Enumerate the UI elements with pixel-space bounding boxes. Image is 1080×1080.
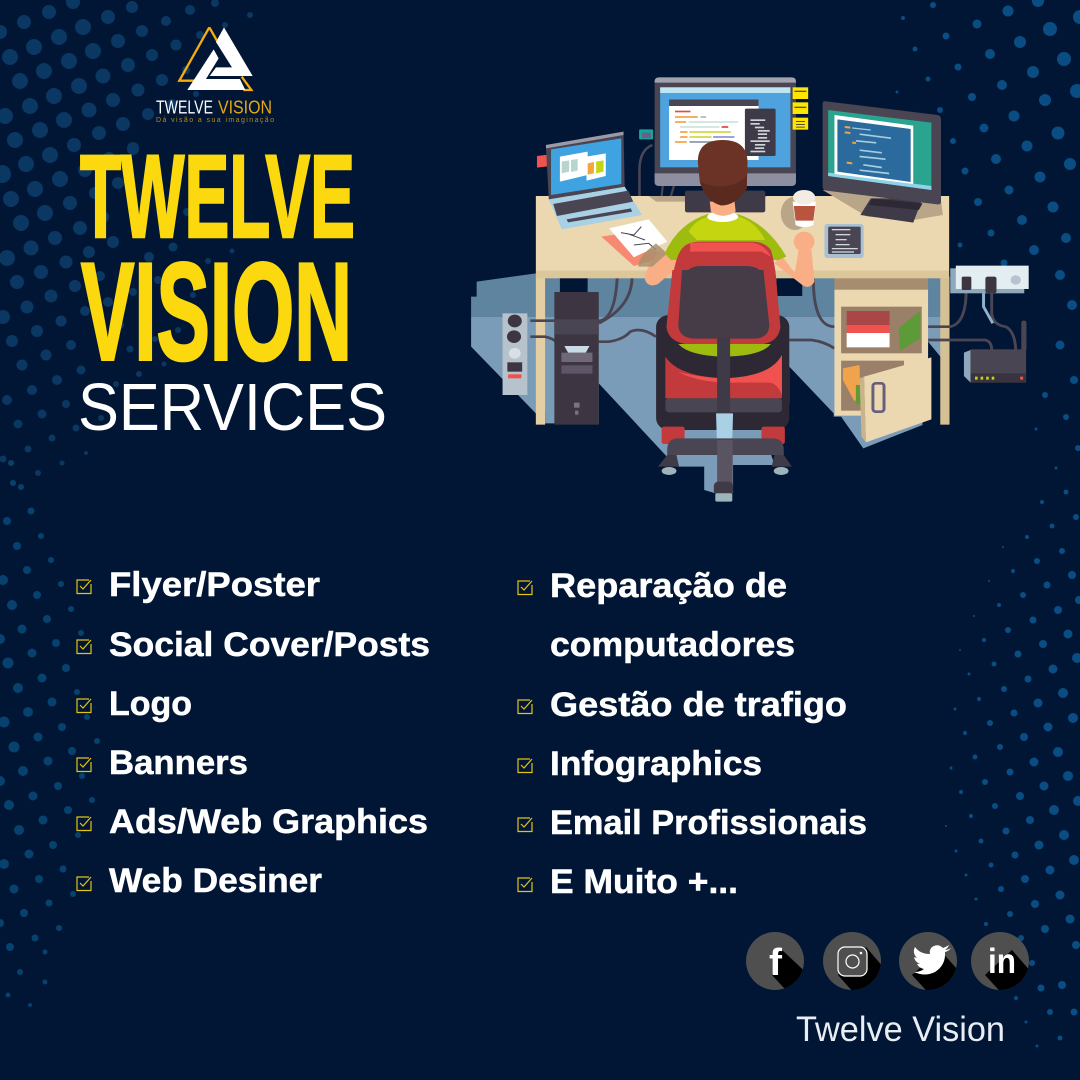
services list: left column: Flyer/Poster	[109, 566, 320, 604]
right monitor	[823, 101, 943, 223]
title: SERVICES	[78, 370, 387, 445]
title	[78, 131, 387, 445]
social icons	[746, 932, 1029, 990]
services list: right column	[518, 567, 867, 901]
icon: facebook	[746, 932, 804, 990]
power strip	[503, 313, 527, 395]
icon: linkedin	[971, 932, 1029, 990]
icon: instagram	[823, 932, 881, 990]
services list: right column: Infographics	[550, 745, 762, 783]
services list: left column: Web Desiner	[109, 862, 322, 900]
cables	[530, 277, 1016, 350]
paper sketch	[601, 219, 667, 266]
services list: left column: Social Cover/Posts	[109, 626, 430, 664]
illustration: developer at desk	[471, 77, 1029, 502]
icon: facebook: f	[769, 942, 782, 984]
logo: Twelve Vision: Dá visão a sua imaginação	[156, 117, 274, 124]
icon: linkedin: in	[988, 942, 1016, 981]
services list: left column: Ads/Web Graphics	[109, 803, 428, 841]
floor and lower desk	[471, 273, 1026, 493]
services list: right column: Reparação de	[550, 567, 787, 605]
services list: right column: computadores	[550, 626, 795, 664]
cabinet	[834, 278, 931, 442]
router	[964, 321, 1026, 383]
computer tower	[554, 292, 599, 425]
services list: left column: Banners	[109, 744, 248, 782]
left laptop	[537, 132, 642, 229]
desk top and equipment	[536, 77, 1029, 300]
services list: right column: E Muito +...	[550, 863, 738, 901]
coffee cup	[781, 190, 816, 230]
logo: Twelve Vision: VISION	[218, 98, 272, 118]
title: TWELVE	[80, 131, 355, 263]
title: VISION	[81, 234, 352, 390]
logo: Twelve Vision	[156, 27, 274, 124]
services list: left column: Logo	[109, 685, 192, 723]
services list: right column: Email Profissionais	[550, 804, 867, 842]
services list: left column	[77, 566, 430, 900]
person	[638, 140, 814, 287]
chair back top	[671, 242, 777, 300]
tablet	[824, 224, 864, 258]
centre monitor	[639, 77, 808, 212]
desk legs	[536, 277, 545, 425]
brand caption: Twelve Vision	[796, 1010, 1005, 1049]
logo: Twelve Vision: TWELVE	[156, 98, 213, 118]
icon: twitter	[899, 932, 957, 990]
services list: right column: Gestão de trafigo	[550, 686, 847, 724]
wall socket	[950, 266, 1029, 293]
office chair	[656, 270, 792, 502]
